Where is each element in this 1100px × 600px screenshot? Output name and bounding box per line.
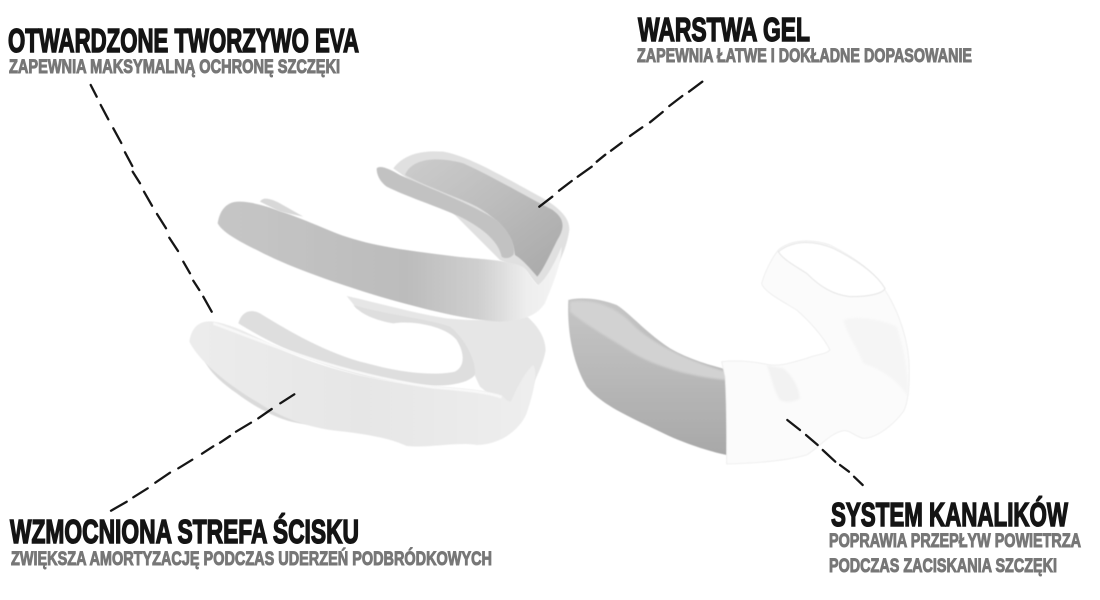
upper guard front wall — [218, 202, 562, 322]
callout: EVA — [8, 22, 359, 78]
leader line: reinforced zone — [111, 394, 294, 511]
lower guard underside — [205, 362, 313, 424]
heading: EVA: OTWARDZONE TWORZYWO EVA — [8, 22, 359, 59]
leader line: EVA — [91, 85, 212, 312]
grey outer EVA layer — [568, 298, 728, 455]
mouthguard pair: upper and lower trays — [189, 151, 569, 446]
lower guard rim highlight — [213, 323, 502, 397]
heading: reinforced zone: WZMOCNIONA STREFA ŚCISKU — [10, 513, 359, 550]
callout: reinforced zone — [10, 513, 492, 570]
leader line: channels — [787, 420, 863, 485]
description: EVA: ZAPEWNIA MAKSYMALNĄ OCHRONĘ SZCZĘKI — [9, 56, 340, 78]
upper guard inner ridge — [377, 167, 514, 258]
upper guard back tray rim — [393, 151, 569, 287]
description: reinforced zone: ZWIĘKSZA AMORTYZACJĘ PODCZAS UDERZEŃ PODBRÓDKOWYCH — [11, 546, 492, 570]
upper guard gel layer — [405, 159, 563, 277]
gel pad on top of inner body — [778, 242, 885, 297]
lower guard back tray — [347, 296, 546, 403]
lower guard front wall — [189, 321, 535, 446]
leader line: gel — [539, 82, 702, 207]
upper guard — [218, 151, 569, 322]
callout: channels — [829, 496, 1081, 577]
side shading — [843, 318, 908, 397]
heading: gel: WARSTWA GEL — [638, 11, 810, 48]
grey layer top face highlight — [570, 301, 727, 380]
description: gel: ZAPEWNIA ŁATWE I DOKŁADNE DOPASOWANIE — [637, 45, 972, 67]
lower guard inner ridge — [238, 305, 475, 386]
white inner body — [722, 241, 909, 464]
lower guard — [189, 296, 546, 446]
upper guard top ridge — [260, 199, 303, 217]
mouthguard cross-section — [568, 241, 909, 464]
callout: gel — [637, 11, 972, 67]
channel shading — [767, 365, 800, 402]
